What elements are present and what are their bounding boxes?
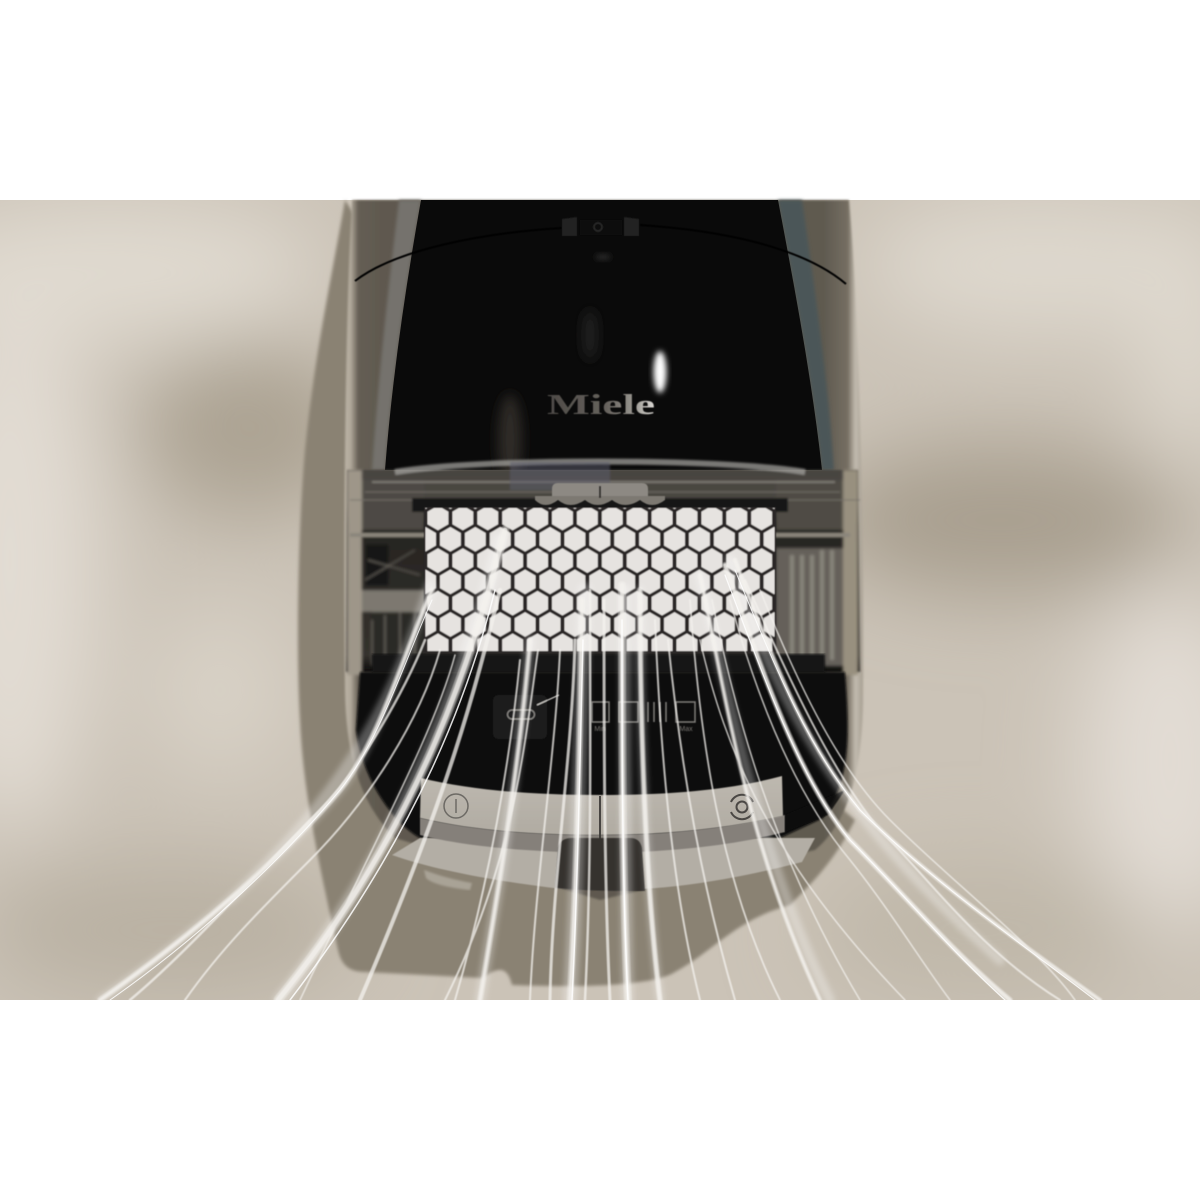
stream bright core: [110, 570, 1095, 1000]
illustration: vacuum cleaner with airflow through hexagon filter: [0, 198, 1200, 1000]
side reflection strip left: [372, 200, 421, 470]
right corner band: [785, 790, 845, 832]
centre slot line: [599, 796, 601, 850]
vacuum body shell: [344, 200, 863, 900]
display indicators: [592, 702, 695, 733]
top casing reflections: [498, 254, 666, 486]
indicator: Min level: Min: [594, 726, 606, 733]
stream ribbons: [100, 530, 1100, 1000]
handle notch: [555, 838, 645, 891]
left mechanics: [347, 470, 425, 675]
transparent mid section: [346, 462, 860, 675]
display button with icon: [493, 695, 559, 739]
lower black display area: [356, 672, 848, 838]
indicator: stripes: [648, 702, 666, 722]
filter top tab: [535, 483, 665, 505]
control panel light band: [420, 776, 783, 835]
black top casing: [385, 200, 822, 470]
indicator: carpet mode: [619, 702, 638, 722]
stream ribbons soft: [100, 530, 1100, 1000]
middle dark band: [420, 815, 785, 853]
body seam line with top clip: [355, 217, 846, 284]
hexagon filter: [424, 507, 776, 653]
lower body ring: [392, 838, 815, 889]
filter lower frame: [372, 654, 825, 672]
indicator: Max level: Max: [679, 726, 693, 733]
cast shadow of vacuum: [298, 200, 855, 986]
Miele logo: Miele: [547, 390, 655, 421]
stream glow layer: [100, 540, 1000, 1000]
cycle button icon: [731, 795, 753, 819]
horizontal rails: [350, 533, 850, 537]
right mechanics: [776, 470, 858, 675]
power button icon: [444, 794, 468, 818]
under tab: [424, 870, 472, 890]
airflow streams: [100, 530, 1100, 1000]
upper translucent lines: [350, 462, 860, 512]
side reflection strip right: [778, 200, 834, 470]
background: beige wall with soft shadows: [0, 195, 1200, 1000]
